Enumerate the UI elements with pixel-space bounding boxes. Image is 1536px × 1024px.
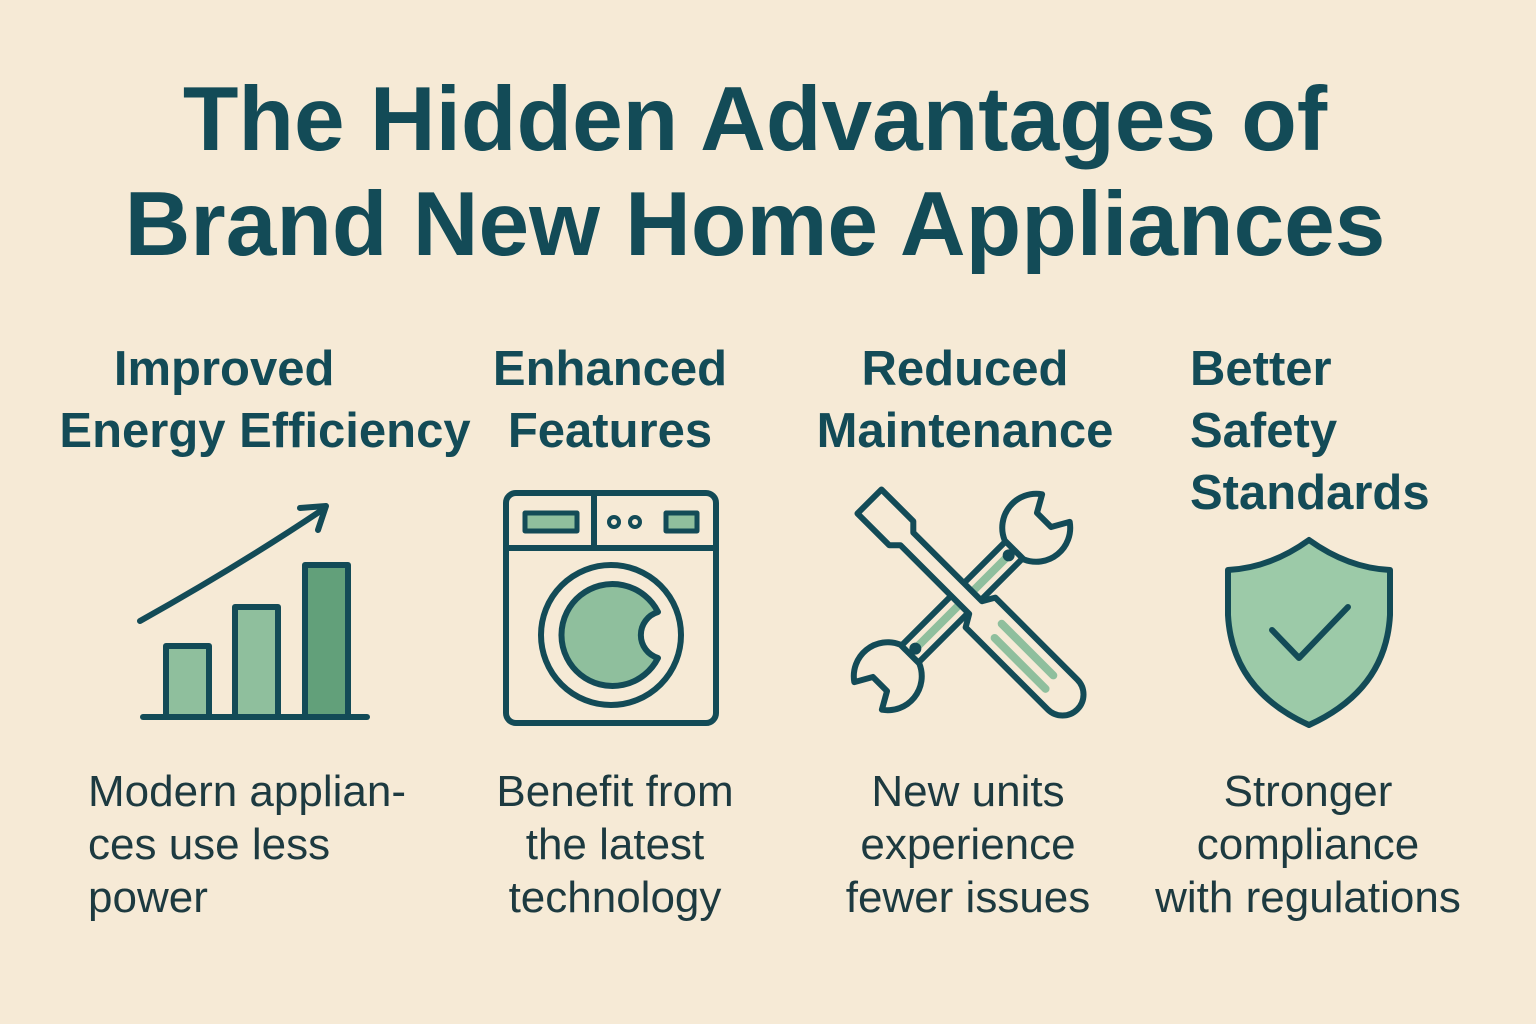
text: energy bbox=[88, 767, 406, 922]
text: features: Benefit from bbox=[496, 767, 734, 816]
text: energy: ces use less bbox=[88, 820, 330, 869]
heading: energy efficiency bbox=[59, 342, 471, 458]
text: features bbox=[496, 767, 734, 922]
text: features: the latest bbox=[526, 820, 704, 869]
heading: better safety standards: Safety bbox=[1190, 404, 1337, 458]
heading: reduced maintenance: Maintenance bbox=[817, 404, 1113, 458]
text: maintenance: fewer issues bbox=[846, 873, 1090, 922]
icon: wrench and screwdriver bbox=[844, 484, 1092, 724]
heading: energy efficiency: Improved bbox=[114, 342, 334, 396]
text: maintenance: experience bbox=[860, 820, 1076, 869]
icon: washing machine bbox=[506, 493, 716, 723]
heading: energy efficiency: Energy Efficiency bbox=[59, 404, 471, 458]
text: safety: with regulations bbox=[1155, 873, 1461, 922]
heading: enhanced features bbox=[493, 342, 727, 458]
text: energy: Modern applian- bbox=[88, 767, 406, 816]
icon: shield with check bbox=[1228, 540, 1390, 725]
heading: better safety standards: Better bbox=[1190, 342, 1332, 396]
text: safety: compliance bbox=[1197, 820, 1419, 869]
heading: enhanced features: Features bbox=[508, 404, 712, 458]
text: maintenance: New units bbox=[871, 767, 1065, 816]
title: Brand New Home Appliances bbox=[125, 174, 1385, 275]
text: energy: power bbox=[88, 873, 208, 922]
text: safety: Stronger bbox=[1224, 767, 1392, 816]
heading: reduced maintenance bbox=[817, 342, 1113, 458]
title: The Hidden Advantages of bbox=[183, 69, 1327, 170]
heading: better safety standards: Standards bbox=[1190, 466, 1430, 520]
text: safety bbox=[1155, 767, 1461, 922]
icon: bar chart with arrow bbox=[140, 506, 367, 717]
heading: better safety standards bbox=[1190, 342, 1430, 520]
title bbox=[125, 69, 1385, 275]
heading: reduced maintenance: Reduced bbox=[862, 342, 1068, 396]
text: maintenance bbox=[846, 767, 1090, 922]
heading: enhanced features: Enhanced bbox=[493, 342, 727, 396]
text: features: technology bbox=[509, 873, 721, 922]
